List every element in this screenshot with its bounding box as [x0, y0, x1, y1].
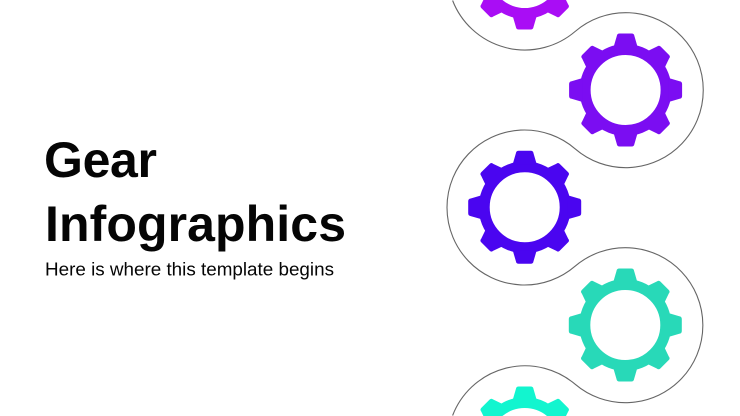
- icon: violet gear: [569, 34, 682, 146]
- icon: mint gear (cropped at bottom): [480, 386, 569, 416]
- contour line connecting the gears: [447, 0, 703, 416]
- icon: magenta gear (cropped at top): [480, 0, 569, 30]
- title: [44, 132, 346, 252]
- icon: indigo gear: [468, 151, 581, 264]
- title: Infographics: [45, 196, 346, 252]
- title: Gear: [44, 132, 157, 188]
- icon: teal gear: [569, 268, 682, 382]
- subtitle: Here is where this template begins: [45, 260, 334, 280]
